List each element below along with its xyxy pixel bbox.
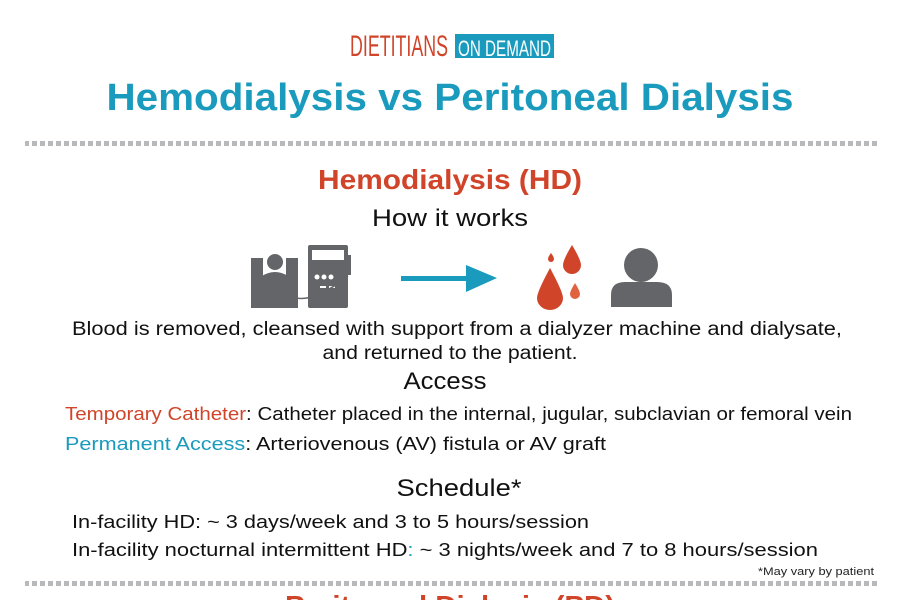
- subheading: how it works: How it works: [372, 205, 528, 232]
- access list: Permanent Access : Arteriovenous (AV) fistula or AV graft: [65, 434, 606, 454]
- schedule list: In-facility nocturnal intermittent HD : ~ 3 nights/week and 7 to 8 hours/session: [72, 540, 818, 560]
- description text: Blood is removed, cleansed with support from a dialyzer machine and dialysate,: [72, 319, 842, 340]
- icon: person: [611, 248, 672, 307]
- footnote: *May vary by patient: [758, 566, 874, 578]
- title: Hemodialysis vs Peritoneal Dialysis: [106, 77, 794, 119]
- icon: blood drops: [537, 245, 581, 310]
- heading: Hemodialysis (HD): Hemodialysis (HD): [318, 164, 582, 195]
- schedule list: In-facility HD: ~ 3 days/week and 3 to 5 hours/session: [72, 512, 589, 532]
- access list: Temporary Catheter : Catheter placed in the internal, jugular, subclavian or femoral vein: [65, 404, 852, 424]
- heading: access: Access: [404, 368, 486, 395]
- heading: schedule: Schedule*: [396, 475, 522, 502]
- schedule list: [72, 512, 818, 560]
- logo: ON DEMAND: [458, 36, 551, 61]
- description text: and returned to the patient.: [322, 343, 578, 364]
- icon: patient with dialysis machine: [251, 245, 351, 308]
- access list: [65, 404, 852, 454]
- logo: DIETITIANS: [350, 30, 448, 63]
- description text: [72, 319, 842, 364]
- arrow: [401, 265, 497, 292]
